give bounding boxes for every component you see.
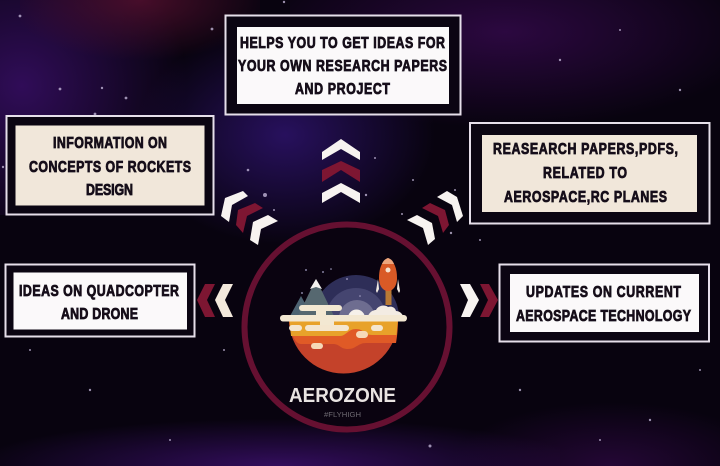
panel: rocket design information: DESIGN (86, 181, 133, 198)
arrow: right chevrons (460, 284, 498, 317)
brand name: AEROZONE (289, 384, 396, 407)
arrow: upper-right chevrons (407, 191, 463, 245)
small stars (301, 268, 361, 297)
planet layers (289, 319, 398, 374)
panel: aerospace technology updates: UPDATES ON CURRENT (526, 283, 681, 300)
panel: rocket design information (6, 116, 214, 214)
mountains (290, 296, 312, 316)
arrow: upper-left chevrons (221, 191, 278, 245)
arrow: left chevrons (197, 284, 233, 317)
cream cloud platform (280, 315, 407, 322)
panel: quadcopter and drone (6, 264, 194, 336)
arrow: up chevrons (322, 139, 360, 203)
panel: top research ideas: HELPS YOU TO GET IDEAS FOR (240, 34, 445, 51)
panel: rocket design information: INFORMATION ON (53, 134, 167, 151)
panel: rocket design information: CONCEPTS OF ROCKETS (29, 158, 191, 175)
smoke clouds (368, 306, 403, 316)
panel: top research ideas (226, 16, 460, 114)
panel: top research ideas: YOUR OWN RESEARCH PAPERS (238, 57, 447, 74)
panel: quadcopter and drone: IDEAS ON QUADCOPTER (19, 282, 179, 299)
icon: planet and rocket (280, 258, 407, 374)
panel: research papers: REASEARCH PAPERS,PDFS, (493, 140, 678, 157)
hashtag: #FLYHIGH (324, 410, 361, 419)
panel: aerospace technology updates: AEROSPACE TECHNOLOGY (516, 307, 692, 324)
panel: quadcopter and drone: AND DRONE (61, 305, 138, 322)
rocket (386, 290, 392, 305)
planet lava capsules (289, 325, 302, 331)
panel: research papers (470, 123, 710, 224)
central logo circle (244, 224, 450, 430)
panel: aerospace technology updates (500, 264, 709, 342)
panel: research papers: AEROSPACE,RC PLANES (504, 188, 667, 205)
panel: top research ideas: AND PROJECT (295, 80, 390, 97)
sky dome (313, 275, 399, 318)
panel: research papers: RELATED TO (543, 164, 627, 181)
